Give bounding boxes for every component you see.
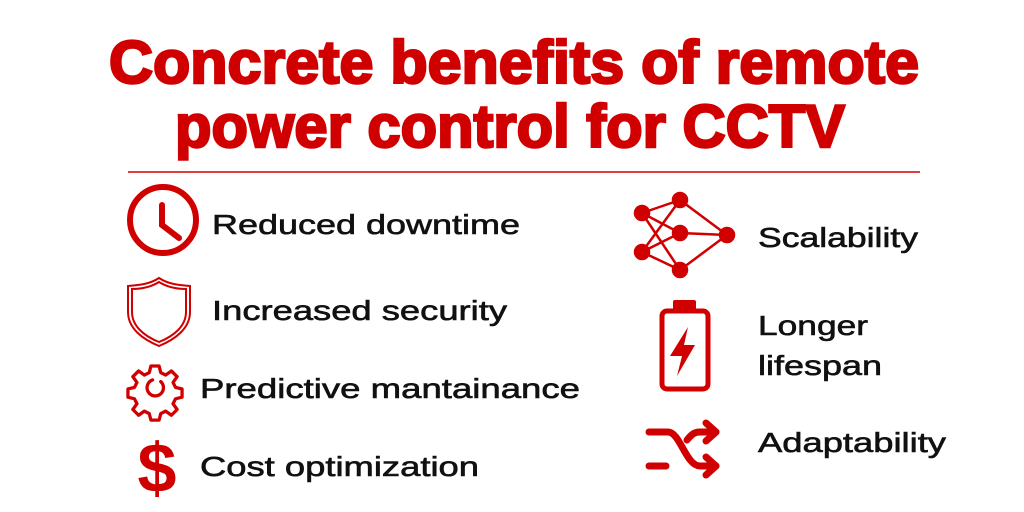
icon: gear xyxy=(128,366,182,420)
text: reduced downtime: Reduced downtime xyxy=(212,209,520,240)
icon: dollar: $ xyxy=(138,429,176,507)
text: scalability: Scalability xyxy=(758,222,918,253)
text: adaptability: Adaptability xyxy=(758,427,946,458)
text: cost optimization: Cost optimization xyxy=(200,451,479,482)
text: longer lifespan xyxy=(758,310,882,381)
icon: shuffle xyxy=(649,423,716,475)
icon: shield xyxy=(128,278,190,346)
title xyxy=(109,29,919,160)
icon: network xyxy=(635,193,734,277)
text: longer lifespan: lifespan xyxy=(758,350,882,381)
icon: clock xyxy=(130,187,196,253)
text: increased security: Increased security xyxy=(212,295,507,326)
text: predictive maintenance: Predictive mantainance xyxy=(200,373,580,404)
title: Concrete benefits of remote xyxy=(109,29,919,96)
title: power control for CCTV xyxy=(175,93,845,160)
icon: battery xyxy=(662,300,708,389)
text: longer lifespan: Longer xyxy=(758,310,868,341)
